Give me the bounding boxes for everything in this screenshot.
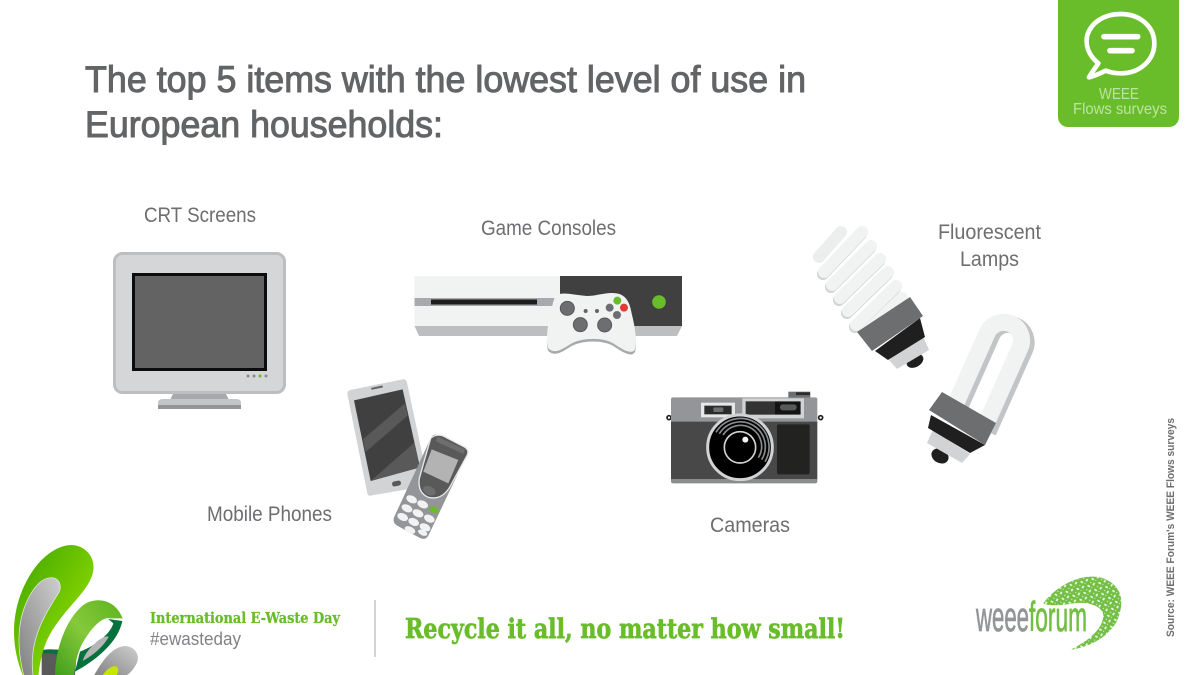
title: The top 5 items with the lowest level of use in bbox=[85, 59, 806, 100]
footer: event name and hashtag: International E-Waste Day bbox=[150, 610, 341, 627]
icon: U-shaped fluorescent lamp bbox=[927, 317, 1032, 467]
title: European households: bbox=[85, 104, 443, 145]
footer: event name and hashtag: #ewasteday bbox=[150, 629, 241, 649]
badge: WEEE Flows surveys: Flows surveys bbox=[1073, 101, 1167, 118]
icon: camera bbox=[667, 392, 823, 483]
logo: International E-Waste Day swoosh bbox=[14, 545, 138, 675]
footer: event name and hashtag bbox=[150, 610, 341, 649]
title bbox=[85, 59, 806, 145]
logo: WEEE Forum: forum bbox=[1029, 593, 1087, 640]
footer: slogan: Recycle it all, no matter how small! bbox=[405, 614, 845, 645]
label: Cameras: Cameras bbox=[710, 514, 790, 537]
source note: Source: WEEE Forum's WEEE Flows surveys bbox=[1165, 418, 1177, 637]
icon: game console and controller bbox=[414, 276, 682, 354]
icon: CRT monitor bbox=[114, 254, 284, 409]
badge: WEEE Flows surveys bbox=[1058, 0, 1179, 127]
label: Fluorescent Lamps: Lamps bbox=[960, 248, 1019, 271]
icon: keypad phone bbox=[394, 435, 468, 539]
icon: smartphone bbox=[347, 379, 428, 496]
label: Game Consoles: Game Consoles bbox=[481, 217, 616, 240]
label: Fluorescent Lamps bbox=[938, 221, 1041, 271]
icon: speech bubble bbox=[1087, 14, 1154, 77]
logo: WEEE Forum: weee bbox=[975, 593, 1029, 640]
label: CRT Screens: CRT Screens bbox=[144, 204, 256, 227]
icon: spiral fluorescent lamp bbox=[819, 232, 929, 371]
badge: WEEE Flows surveys: WEEE bbox=[1099, 86, 1139, 103]
label: Mobile Phones: Mobile Phones bbox=[207, 503, 332, 526]
icon: mobile phones bbox=[347, 379, 468, 539]
logo: WEEE Forum bbox=[975, 577, 1121, 650]
icon: controller bbox=[547, 293, 636, 354]
label: Fluorescent Lamps: Fluorescent bbox=[938, 221, 1041, 244]
